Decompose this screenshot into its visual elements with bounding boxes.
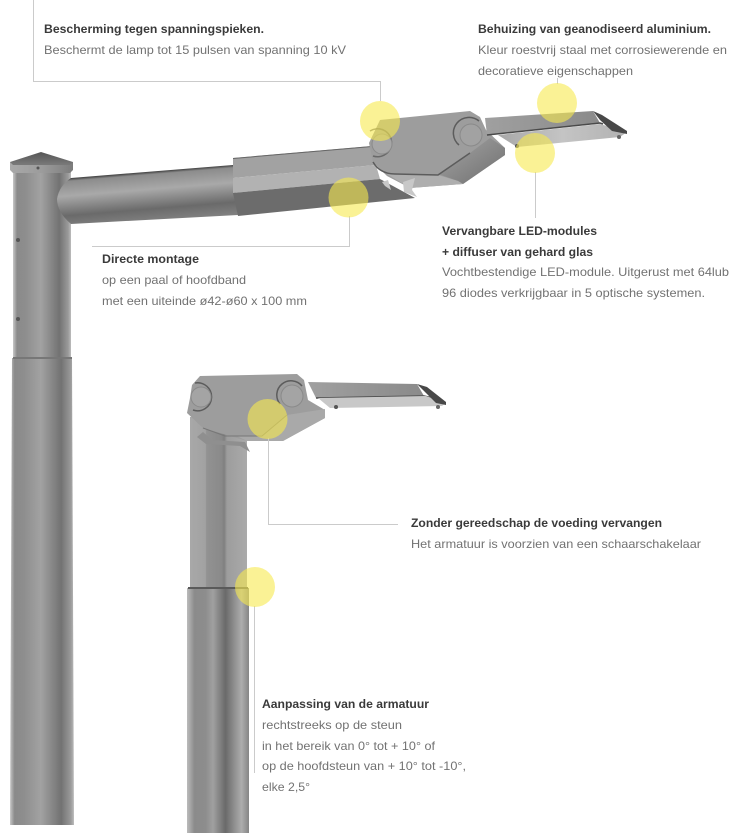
text: surge protection: Bescherming tegen spanningspieken. [44,22,264,36]
text: fixture adjustment: in het bereik van 0° tot + 10° of [262,739,436,753]
left lamp post [10,152,74,825]
upper luminaire arm [57,146,415,224]
leader line: tool-free driver [268,438,398,524]
leader line: housing [556,78,558,84]
lower lamp post [187,417,250,833]
lower luminaire head [187,374,446,441]
yellow hotspots [235,83,577,607]
text: replaceable LED modules: + diffuser van gehard glas [442,245,593,259]
text: replaceable LED modules: Vochtbestendige LED-module. Uitgerust met 64lub [442,265,729,279]
text: replaceable LED modules: 96 diodes verkrijgbaar in 5 optische systemen. [442,286,705,300]
text: direct mounting: Directe montage [102,252,199,266]
text: surge protection: Beschermt de lamp tot 15 pulsen van spanning 10 kV [44,43,346,57]
text: direct mounting [102,252,307,308]
text: anodised housing: Kleur roestvrij staal met corrosiewerende en [478,43,727,57]
text: replaceable LED modules [442,224,729,300]
text: anodised housing: Behuizing van geanodiseerd aluminium. [478,22,711,36]
leader line: fixture adjustment [254,606,256,773]
text: tool-free driver replacement: Het armatuur is voorzien van een schaarschakelaar [411,537,701,551]
upper luminaire head [369,111,627,197]
text: tool-free driver replacement [411,516,701,551]
leader line: LED modules [534,172,536,218]
leader line: direct mounting [92,216,350,246]
text: fixture adjustment: elke 2,5° [262,780,310,794]
leader line: surge protection [34,0,380,101]
text: fixture adjustment: op de hoofdsteun van + 10° tot -10°, [262,759,466,773]
text: direct mounting: met een uiteinde ø42-ø60 x 100 mm [102,294,307,308]
text: fixture adjustment: Aanpassing van de armatuur [262,697,429,711]
text: surge protection [44,22,346,57]
text: fixture adjustment [262,697,466,794]
text: tool-free driver replacement: Zonder gereedschap de voeding vervangen [411,516,662,530]
text: anodised housing: decoratieve eigenschappen [478,64,633,78]
text: direct mounting: op een paal of hoofdband [102,273,246,287]
text: anodised housing [478,22,727,78]
text: fixture adjustment: rechtstreeks op de steun [262,718,402,732]
text: replaceable LED modules: Vervangbare LED-modules [442,224,597,238]
